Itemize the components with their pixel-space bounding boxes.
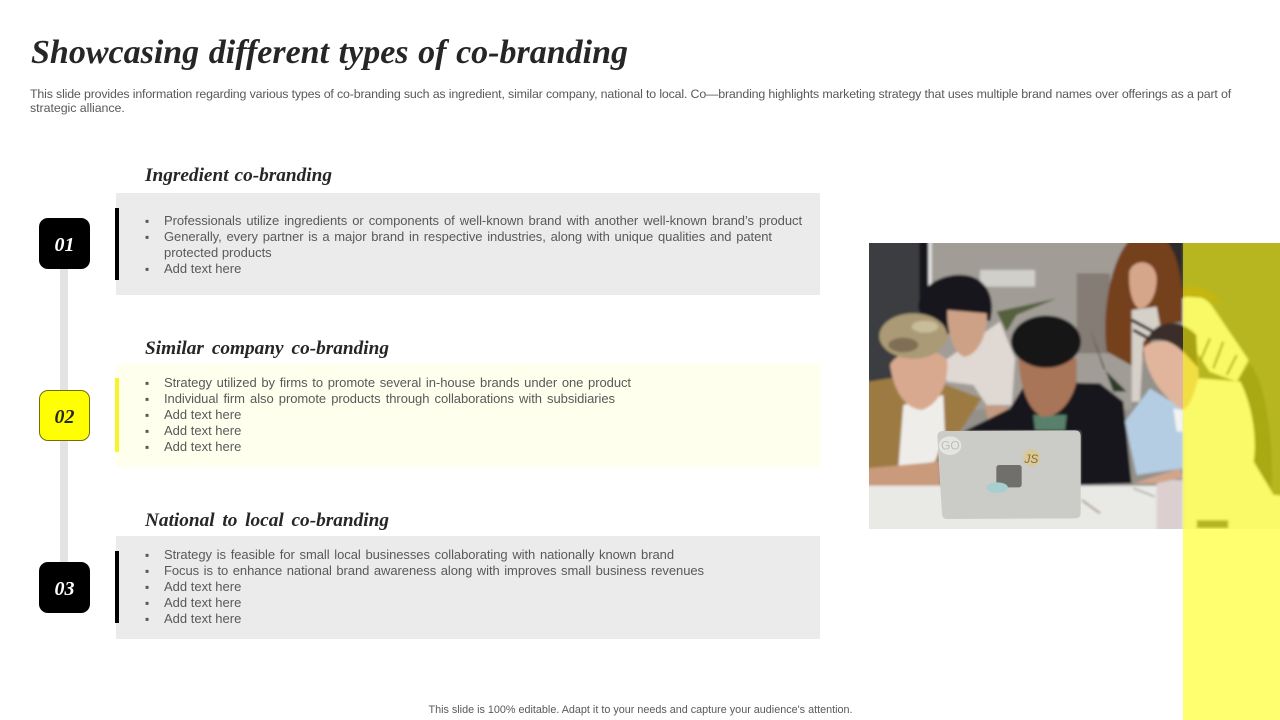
person one [847,377,982,495]
national to local bullet list: Strategy is feasible for small local businesses collaborating with nationally known brand [164,547,674,562]
national to local bullet list: ▪ [145,612,149,626]
timeline connector [60,269,68,562]
ingredient bullet list: Add text here [164,261,241,276]
accent bar 1 [115,208,119,280]
national to local bullet list: ▪ [145,548,149,562]
redhead [1105,232,1183,368]
similar company bullet list: Add text here [164,439,241,454]
ingredient bullet list: Professionals utilize ingredients or components of well-known brand with another well-known brand’s product [164,213,802,228]
ingredient bullet list: ▪ [145,214,149,228]
national to local bullet list: Add text here [164,611,241,626]
national to local bullet list: Add text here [164,579,241,594]
yellow overlay band [1183,243,1280,720]
national to local bullet list: Focus is to enhance national brand awareness along with improves small business revenues [164,563,704,578]
heading: ingredient: Ingredient co-branding [145,165,332,186]
similar company bullet list: Add text here [164,407,241,422]
title: Showcasing different types of co-branding [31,34,628,71]
similar company bullet list: ▪ [145,376,149,390]
similar company bullet list: Strategy utilized by firms to promote several in-house brands under one product [164,375,631,390]
badge 03: 03 [54,578,74,600]
ingredient bullet list: ▪ [145,262,149,276]
description text: strategic alliance. [30,101,125,115]
ingredient bullet list: ▪ [145,230,149,244]
person three jacket and face [963,382,1132,485]
national to local bullet list: ▪ [145,564,149,578]
accent bar 3 [115,551,119,623]
photo: team around a laptop [869,243,1280,529]
panel: national to local [116,536,820,639]
similar company bullet list: ▪ [145,424,149,438]
description text [30,87,1232,115]
national to local bullet list: ▪ [145,596,149,610]
similar company bullet list: ▪ [145,392,149,406]
badge 01: 01 [54,234,74,256]
laptop [937,430,1081,519]
description text: This slide provides information regarding various types of co-branding such as ingredient, similar company, national to local. Co—branding highlights marketing strategy that uses multiple brand names over offerings as a part of [30,87,1231,101]
similar company bullet list: Add text here [164,423,241,438]
badge 03 [39,562,90,613]
ingredient bullet list [145,213,802,276]
panel: ingredient [116,193,820,295]
laptop: JS [1023,452,1038,466]
right-hand figure under overlay [1237,363,1272,488]
heading: similar company: Similar company co-branding [145,338,389,359]
heading: national to local: National to local co-branding [145,510,389,531]
footer note: This slide is 100% editable. Adapt it to your needs and capture your audience's attention. [428,704,852,716]
person five [1125,388,1183,475]
similar company bullet list [145,375,631,454]
laptop: GO [941,439,960,453]
badge 02 [39,390,90,441]
accent bar 2 [115,378,119,452]
similar company bullet list: Individual firm also promote products through collaborations with subsidiaries [164,391,615,406]
ingredient bullet list: Generally, every partner is a major brand in respective industries, along with unique qualities and patent [164,229,772,244]
panel: similar company [116,364,820,467]
table [843,486,1183,559]
similar company bullet list: ▪ [145,440,149,454]
national to local bullet list: Add text here [164,595,241,610]
ingredient bullet list: protected products [164,245,272,260]
national to local bullet list: ▪ [145,580,149,594]
similar company bullet list: ▪ [145,408,149,422]
badge 01 [39,218,90,269]
badge 02: 02 [54,406,74,428]
person two [943,322,1015,405]
national to local bullet list [145,547,704,626]
